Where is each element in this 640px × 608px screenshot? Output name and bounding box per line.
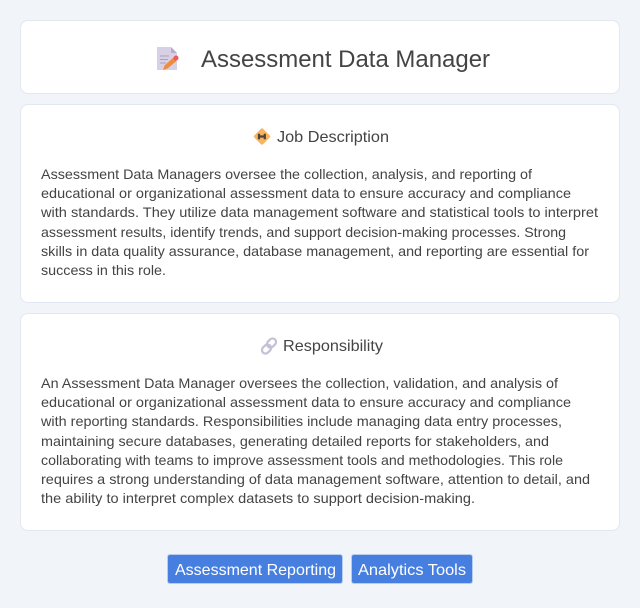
- tag: assessment reporting: Assessment Reporting: [175, 562, 336, 579]
- tag: analytics tools: [351, 554, 473, 584]
- text: job description: with standards. They utilize data management software and statistical tools to interpret: [40, 204, 598, 220]
- text: responsibility: with reporting standards. Responsibilities include managing data entry processes,: [40, 413, 562, 429]
- text: responsibility: maintaining secure databases, generating detailed reports for stakeholders, and: [41, 433, 549, 449]
- header card: [20, 20, 620, 94]
- text: job description: Assessment Data Managers oversee the collection, analysis, and reporting of: [41, 166, 532, 182]
- text: job description: educational or organizational assessment data to ensure accuracy and compliance: [41, 185, 571, 201]
- icon: diamond sign: [253, 128, 271, 145]
- tag: analytics tools: Analytics Tools: [358, 562, 466, 579]
- panel: responsibility: [20, 313, 620, 531]
- text: responsibility: collaborating with teams to improve assessment tools and methodologies. This role: [41, 452, 563, 468]
- panel: job description: [20, 104, 620, 303]
- icon: chain link: [260, 337, 278, 355]
- icon: document with pencil: [157, 47, 178, 70]
- text: job description: [40, 166, 598, 278]
- text: responsibility: An Assessment Data Manager oversees the collection, validation, and analysis of: [41, 375, 558, 391]
- text: responsibility: educational or organizational assessment data to ensure accuracy and compliance: [41, 394, 571, 410]
- text: responsibility: requires a strong understanding of data management software, attention to detail, and: [41, 471, 590, 487]
- heading: job description: Job Description: [277, 129, 389, 146]
- text: responsibility: the ability to interpret complex datasets to support decision-making.: [41, 490, 475, 506]
- text: job description: success in this role.: [41, 262, 166, 278]
- text: responsibility: [40, 375, 590, 506]
- title: Assessment Data Manager: [201, 46, 490, 73]
- tag: assessment reporting: [167, 554, 343, 584]
- text: job description: skills in data quality assurance, database management, and reporting are essential for: [41, 243, 589, 259]
- text: job description: assessment results, identify trends, and support decision-making processes. Strong: [41, 224, 566, 240]
- heading: responsibility: Responsibility: [283, 338, 383, 355]
